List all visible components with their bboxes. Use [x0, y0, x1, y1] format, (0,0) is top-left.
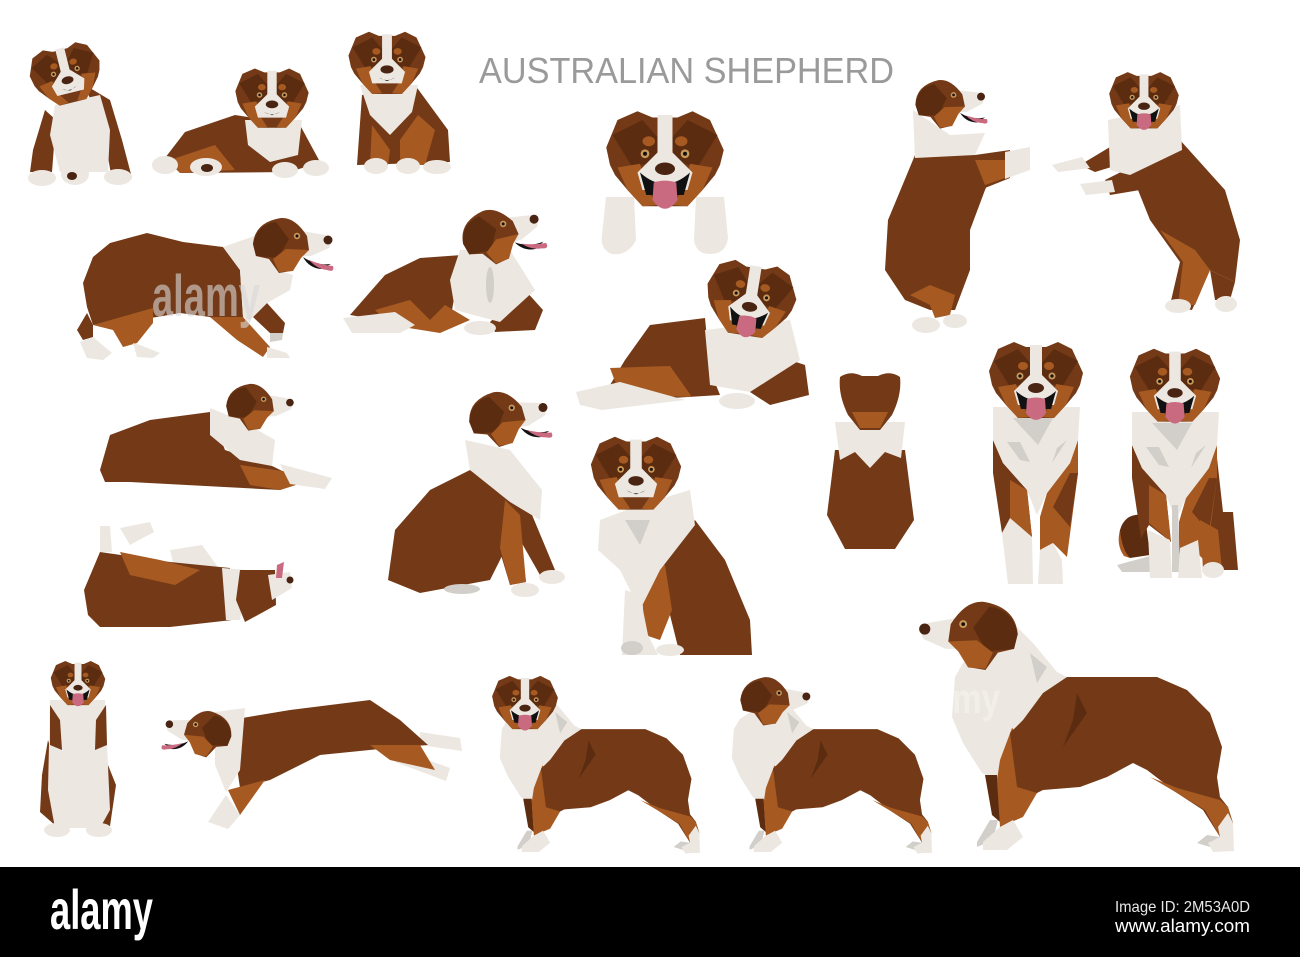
dog: sitting, three-quarter, facing viewer: [591, 437, 752, 656]
dog: rolling on back: [84, 522, 294, 627]
watermark: alamy over walking dog: alamy: [152, 264, 260, 329]
dog: running, leaping left: [161, 700, 462, 829]
dog: standing on hind legs, front three-quarter: [1052, 72, 1240, 313]
dog: begging, front view: [40, 661, 116, 837]
dog: standing on hind legs, side: [885, 77, 1030, 333]
dog: lying puppy: [152, 68, 329, 178]
dog: lying, front three-quarter: [576, 256, 809, 410]
dog: standing, side, front-facing head: [492, 676, 700, 853]
dog: lying, looking up: [343, 197, 548, 335]
dog: standing, side, looking back: [732, 677, 932, 853]
title: AUSTRALIAN SHEPHERD: [479, 50, 894, 91]
dog: large standing, side profile: [919, 602, 1234, 852]
dog: walking, side: [77, 218, 333, 360]
dog: sitting puppy, head tilted: [24, 38, 132, 186]
dog: sitting, side, looking up: [388, 385, 565, 597]
dog: sitting puppy, front view: [348, 32, 451, 174]
footer website: www.alamy.com: [1114, 916, 1250, 936]
dog: standing, front view: [989, 342, 1083, 584]
dog: lying flat, side: [100, 384, 332, 490]
dog: head peeking over edge: [602, 111, 728, 254]
footer bar: [0, 867, 1300, 957]
footer logo: alamy: [50, 878, 153, 941]
watermark: mark on large dog chest: my: [952, 675, 1001, 722]
footer image id: Image ID: 2M53A0D: [1115, 899, 1250, 916]
dog: sitting, front view: [1117, 349, 1238, 578]
dog: sitting, back view: [827, 373, 914, 549]
